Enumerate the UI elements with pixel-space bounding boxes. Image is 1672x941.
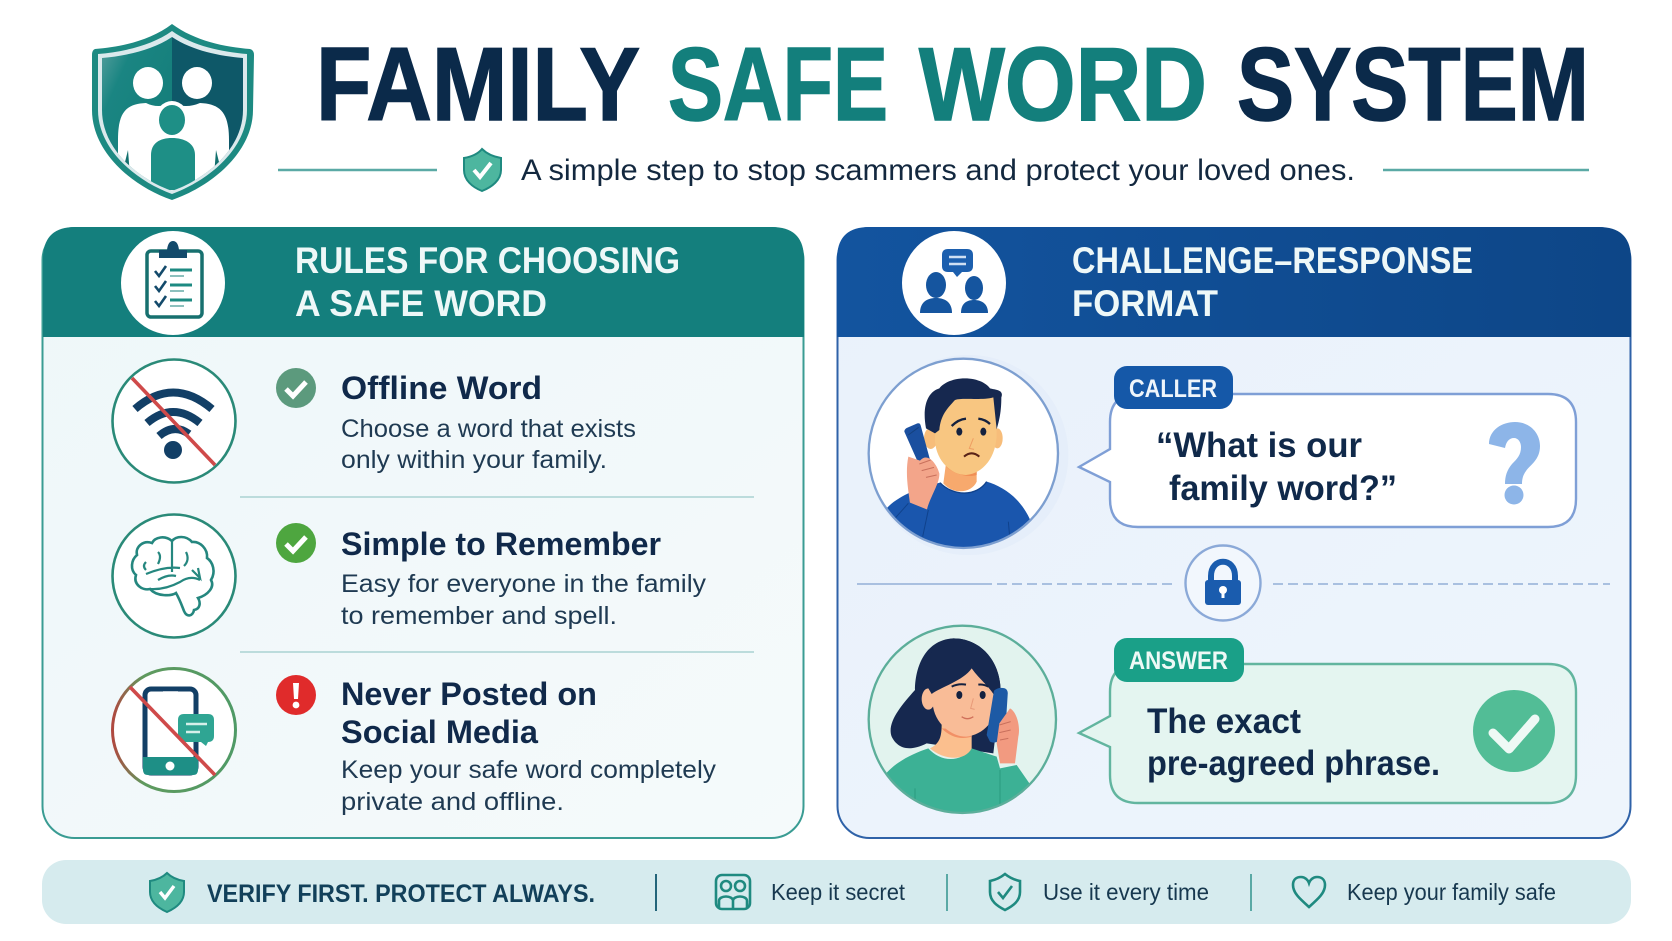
subtitle: [278, 149, 1589, 191]
icon: people box: [716, 875, 750, 909]
text: never posted: Keep your safe word completely: [341, 756, 717, 784]
text: never posted: [341, 676, 717, 816]
panel: challenge-response format: [837, 227, 1631, 838]
title: FAMILY: [316, 27, 640, 143]
panel heading: challenge-response: CHALLENGE–RESPONSE: [1072, 240, 1473, 281]
text: simple to remember: Easy for everyone in the family: [341, 570, 707, 598]
icon: padlock: [1186, 546, 1260, 620]
text: never posted: Social Media: [341, 714, 538, 750]
panel heading: rules: A SAFE WORD: [295, 283, 547, 324]
footer item: use it every time: Use it every time: [1043, 879, 1209, 905]
icon: shield outline check: [990, 874, 1020, 910]
panel heading: challenge-response: [1072, 240, 1473, 324]
panel header: rules: [43, 227, 804, 337]
subtitle: A simple step to stop scammers and protect your loved ones.: [521, 154, 1355, 187]
tag: caller: CALLER: [1129, 375, 1217, 403]
speech bubble: caller question: [1079, 394, 1576, 527]
text: offline word: only within your family.: [341, 446, 607, 474]
text: offline word: Offline Word: [341, 370, 542, 406]
panel heading: challenge-response: FORMAT: [1072, 283, 1218, 324]
speech bubble: caller question: family word?”: [1169, 469, 1397, 508]
icon: clipboard checklist: [121, 231, 225, 335]
footer item: keep it secret: Keep it secret: [771, 879, 906, 905]
panel heading: rules: [295, 240, 680, 324]
text: offline word: Choose a word that exists: [341, 415, 636, 443]
tag: answer: [1114, 638, 1244, 682]
title: WORD: [919, 27, 1207, 143]
title: SAFE: [668, 27, 888, 143]
tag: answer: ANSWER: [1129, 647, 1228, 675]
icon: check badge green: [276, 523, 316, 563]
text: simple to remember: to remember and spell.: [341, 602, 617, 630]
icon: two people talking: [902, 231, 1006, 335]
icon: check badge muted: [276, 368, 316, 408]
icon: wifi crossed out: [112, 360, 236, 482]
tag: caller: [1114, 366, 1233, 409]
title: [316, 27, 1589, 143]
panel heading: rules: RULES FOR CHOOSING: [295, 240, 680, 281]
speech bubble: answer: [1079, 664, 1576, 803]
panel header: challenge-response: [837, 227, 1631, 337]
text: never posted: private and offline.: [341, 788, 564, 816]
illustration: answering woman on phone: [869, 626, 1056, 820]
footer bar: [42, 860, 1631, 924]
text: offline word: [341, 370, 636, 474]
rule: simple to remember: [112, 514, 707, 638]
icon: phone crossed out: [112, 668, 236, 792]
rule: offline word: [112, 360, 636, 482]
icon: question mark: [1489, 422, 1540, 504]
illustration: caller man on phone: [868, 355, 1068, 555]
divider with lock: [857, 546, 1610, 620]
icon: warning badge: [276, 675, 316, 715]
speech bubble: caller question: “What is our: [1156, 426, 1362, 465]
speech bubble: answer: pre-agreed phrase.: [1147, 744, 1440, 783]
slogan: VERIFY FIRST. PROTECT ALWAYS.: [207, 880, 595, 908]
panel: rules for choosing a safe word: [42, 227, 804, 838]
speech bubble: answer: The exact: [1147, 702, 1301, 741]
icon: heart: [1293, 877, 1325, 907]
text: simple to remember: Simple to Remember: [341, 526, 661, 562]
text: never posted: Never Posted on: [341, 676, 597, 712]
brand shield logo: [92, 24, 254, 200]
footer item: keep your family safe: Keep your family safe: [1347, 879, 1556, 905]
icon: verified shield: [150, 873, 184, 912]
title: SYSTEM: [1237, 27, 1589, 143]
icon: large check: [1473, 690, 1555, 772]
text: simple to remember: [341, 526, 707, 630]
icon: brain: [112, 514, 236, 638]
rule: never posted on social media: [112, 668, 717, 816]
